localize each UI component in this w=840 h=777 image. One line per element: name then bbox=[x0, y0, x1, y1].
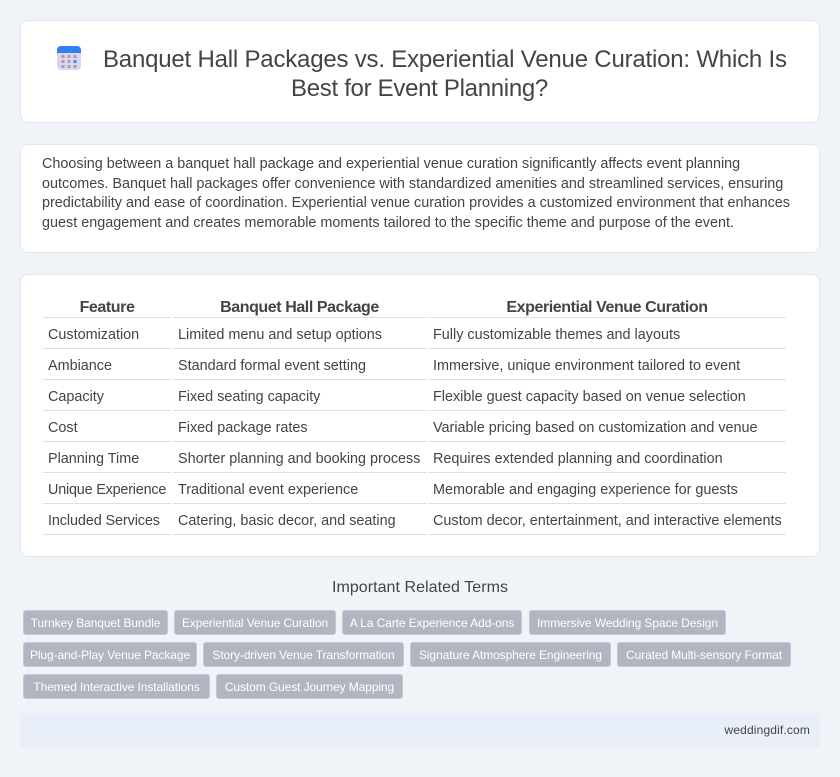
footer source: weddingdif.com bbox=[725, 723, 810, 737]
table rows: Fixed seating capacity bbox=[178, 389, 320, 405]
title bbox=[103, 46, 787, 102]
panel: title card bbox=[20, 20, 820, 123]
related terms tags bbox=[23, 610, 791, 699]
table rows: Shorter planning and booking process bbox=[178, 451, 420, 467]
table rows: Cost bbox=[48, 420, 78, 436]
related terms tags: Turnkey Banquet Bundle bbox=[31, 616, 160, 630]
related terms tags: Custom Guest Journey Mapping bbox=[225, 680, 394, 694]
table rows: Planning Time bbox=[48, 451, 139, 467]
related terms tags: Themed Interactive Installations bbox=[33, 680, 200, 694]
panel: introduction bbox=[20, 144, 820, 253]
table rows: Fixed package rates bbox=[178, 420, 308, 436]
table rows: Traditional event experience bbox=[178, 482, 358, 498]
related terms tags: Curated Multi-sensory Format bbox=[626, 648, 782, 662]
table rows: Fully customizable themes and layouts bbox=[433, 327, 680, 343]
table rows: Unique Experience bbox=[48, 482, 166, 498]
title: Best for Event Planning? bbox=[291, 75, 548, 102]
related terms tags: Story-driven Venue Transformation bbox=[212, 648, 395, 662]
table rows: Immersive, unique environment tailored to event bbox=[433, 358, 740, 374]
intro text: Choosing between a banquet hall package and experiential venue curation significantly affects event planning bbox=[42, 156, 740, 172]
table header: Feature bbox=[80, 299, 134, 316]
table header: Banquet Hall Package bbox=[220, 299, 379, 316]
table rows: Catering, basic decor, and seating bbox=[178, 513, 396, 529]
table header bbox=[80, 299, 708, 316]
footer bar bbox=[20, 713, 820, 747]
related terms tags: Experiential Venue Curation bbox=[182, 616, 328, 630]
related terms tags: A La Carte Experience Add-ons bbox=[350, 616, 514, 630]
icon: calendar bbox=[57, 46, 81, 70]
table rows: Limited menu and setup options bbox=[178, 327, 382, 343]
related terms tags: Immersive Wedding Space Design bbox=[537, 616, 718, 630]
intro text: outcomes. Banquet hall packages offer convenience with standardized amenities and streamlined services, ensuring bbox=[42, 176, 783, 192]
table rows: Memorable and engaging experience for guests bbox=[433, 482, 738, 498]
related terms tags: Plug-and-Play Venue Package bbox=[30, 648, 190, 662]
table rows: Capacity bbox=[48, 389, 104, 405]
table header: Experiential Venue Curation bbox=[506, 299, 708, 316]
table rows: Included Services bbox=[48, 513, 160, 529]
related terms heading: Important Related Terms bbox=[332, 579, 508, 596]
intro text bbox=[42, 156, 790, 231]
table rows: Customization bbox=[48, 327, 139, 343]
table rows bbox=[43, 317, 786, 535]
table rows: Variable pricing based on customization and venue bbox=[433, 420, 758, 436]
table rows: Requires extended planning and coordination bbox=[433, 451, 723, 467]
table rows: Standard formal event setting bbox=[178, 358, 366, 374]
intro text: guest engagement and creates memorable moments tailored to the specific theme and purpose of the event. bbox=[42, 215, 734, 231]
intro text: predictability and ease of coordination. Experiential venue curation provides a customized environment that enhances bbox=[42, 195, 790, 211]
title: Banquet Hall Packages vs. Experiential Venue Curation: Which Is bbox=[103, 46, 787, 73]
table rows: Flexible guest capacity based on venue selection bbox=[433, 389, 746, 405]
table rows: Custom decor, entertainment, and interactive elements bbox=[433, 513, 782, 529]
related terms tags: Signature Atmosphere Engineering bbox=[419, 648, 602, 662]
panel: comparison table bbox=[20, 274, 820, 557]
table rows: Ambiance bbox=[48, 358, 112, 374]
